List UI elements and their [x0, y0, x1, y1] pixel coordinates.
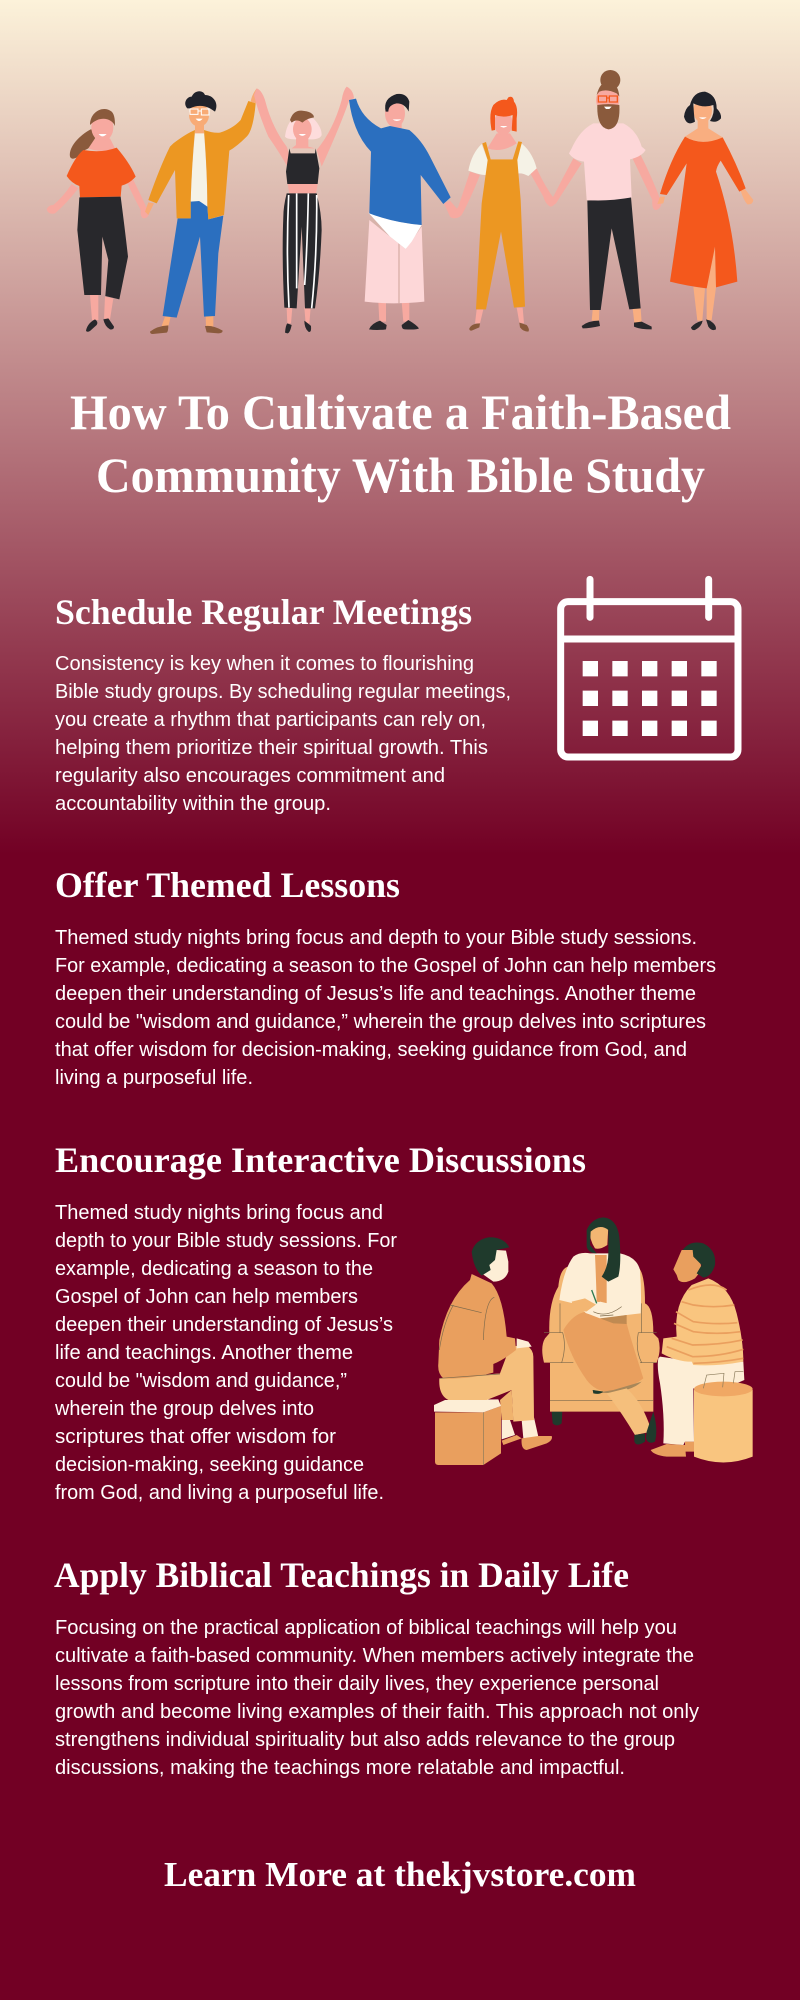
body text — [55, 927, 716, 1089]
person 5: woman with red hair and yellow overalls — [452, 97, 555, 332]
footer call to action: Learn More at thekjvstore.com — [164, 1855, 636, 1894]
body text: that offer wisdom for decision-making, seeking guidance from God, and — [55, 1039, 687, 1061]
body text: wherein the group delves into — [54, 1398, 314, 1420]
body text: Consistency is key when it comes to flourishing — [55, 653, 474, 675]
left man on box seat — [434, 1237, 552, 1465]
body text: life and teachings. Another theme — [55, 1342, 353, 1364]
title: Community With Bible Study — [96, 447, 705, 503]
body text: Themed study nights bring focus and depth to your Bible study sessions. — [55, 927, 697, 949]
center woman in armchair — [542, 1217, 660, 1444]
section 1: schedule regular meetings — [55, 592, 511, 815]
body text: lessons from scripture into their daily lives, they experience personal — [55, 1673, 659, 1695]
person 4: man in blue sweater and pink trousers — [349, 94, 460, 330]
body text: Bible study groups. By scheduling regular meetings, — [55, 681, 511, 703]
icon: calendar — [561, 579, 738, 757]
title — [70, 384, 731, 503]
person 2: man in yellow jacket and blue jeans — [145, 88, 258, 334]
heading: Encourage Interactive Discussions — [55, 1140, 586, 1180]
body text: discussions, making the teachings more relatable and impactful. — [55, 1757, 625, 1779]
body text — [55, 1617, 699, 1779]
body text: deepen their understanding of Jesus’s — [55, 1314, 393, 1336]
heading: Apply Biblical Teachings in Daily Life — [54, 1555, 629, 1595]
body text: scriptures that offer wisdom for — [55, 1426, 336, 1448]
body text: example, dedicating a season to the — [55, 1258, 373, 1280]
body text: living a purposeful life. — [55, 1067, 253, 1089]
section 2: offer themed lessons — [55, 865, 716, 1089]
illustration: group of people holding hands — [47, 70, 753, 334]
body text: decision-making, seeking guidance — [55, 1454, 364, 1476]
body text — [54, 1202, 397, 1504]
right man on round stool — [651, 1242, 753, 1462]
body text: from God, and living a purposeful life. — [55, 1482, 384, 1504]
title: How To Cultivate a Faith-Based — [70, 384, 731, 440]
person 6: bearded man with bun and glasses — [547, 70, 662, 329]
section 3: encourage interactive discussions — [54, 1140, 586, 1504]
illustration: three people in discussion — [434, 1217, 753, 1465]
body text: helping them prioritize their spiritual growth. This — [55, 737, 488, 759]
person 1: woman in orange top — [47, 109, 149, 332]
body text: you create a rhythm that participants can rely on, — [55, 709, 486, 731]
body text: growth and become living examples of their faith. This approach not only — [55, 1701, 699, 1723]
body text: Themed study nights bring focus and — [55, 1202, 383, 1224]
person 7: woman in orange dress — [657, 92, 753, 330]
body text: Gospel of John can help members — [55, 1286, 358, 1308]
body text: For example, dedicating a season to the Gospel of John can help members — [55, 955, 716, 977]
body text: accountability within the group. — [55, 793, 331, 815]
heading: Offer Themed Lessons — [55, 865, 400, 905]
person 3: woman in black crop top and striped trousers — [254, 87, 354, 333]
body text: Focusing on the practical application of biblical teachings will help you — [55, 1617, 677, 1639]
body text: could be "wisdom and guidance,” — [55, 1370, 347, 1392]
body text: regularity also encourages commitment and — [55, 765, 445, 787]
body text — [55, 653, 511, 815]
body text: deepen their understanding of Jesus’s life and teachings. Another theme — [55, 983, 696, 1005]
body text: cultivate a faith-based community. When members actively integrate the — [55, 1645, 694, 1667]
body text: strengthens individual spirituality but also adds relevance to the group — [55, 1729, 675, 1751]
body text: could be "wisdom and guidance,” wherein the group delves into scriptures — [55, 1011, 706, 1033]
body text: depth to your Bible study sessions. For — [55, 1230, 397, 1252]
section 4: apply biblical teachings in daily life — [54, 1555, 699, 1779]
heading: Schedule Regular Meetings — [55, 592, 472, 632]
